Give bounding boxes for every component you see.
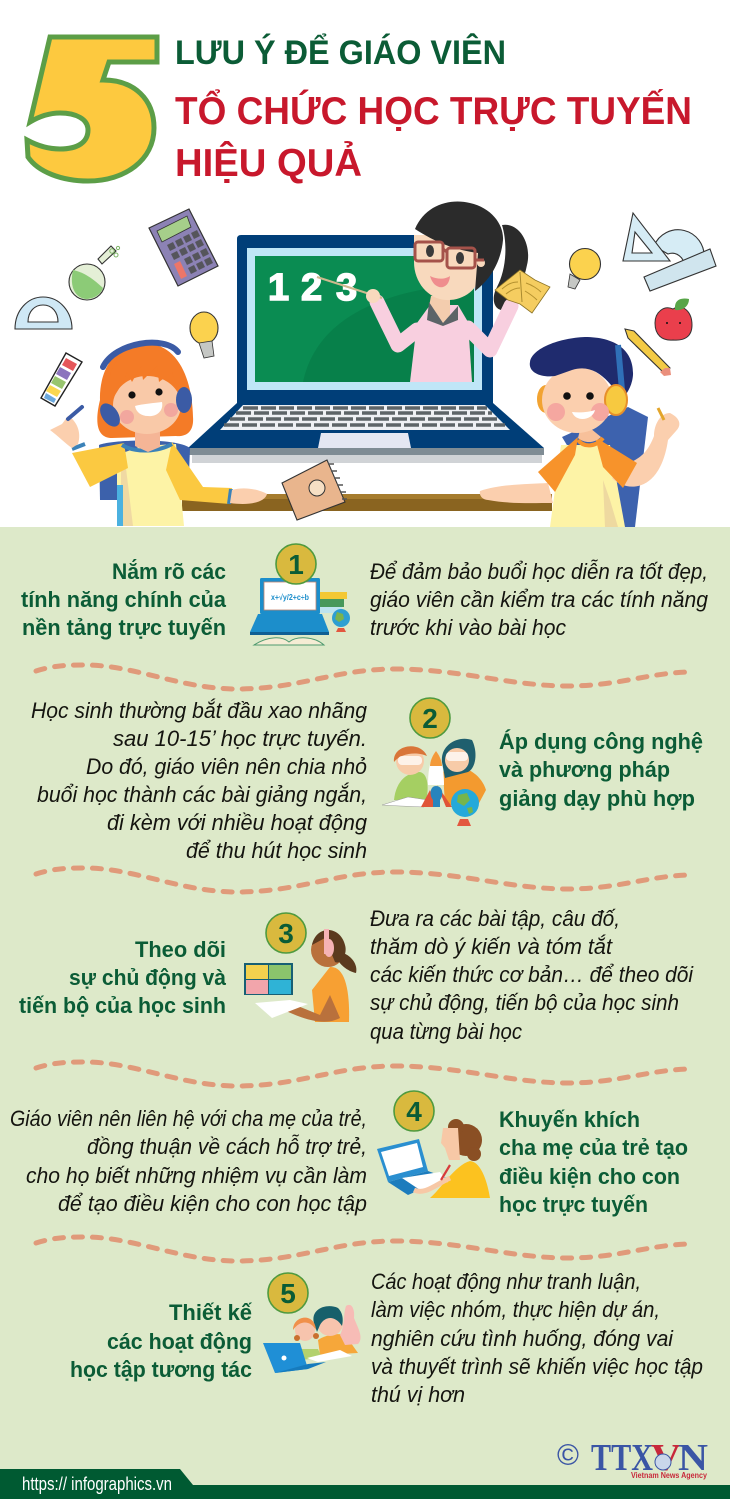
number badge 1 <box>276 544 316 584</box>
heading 5: học tập tương tác <box>70 1357 252 1382</box>
heading 1 <box>21 559 227 640</box>
body text 1: Để đảm bảo buổi học diễn ra tốt đẹp, <box>370 559 708 584</box>
section 1 <box>21 544 709 645</box>
divider lines <box>36 665 693 1261</box>
heading 2: giảng dạy phù hợp <box>499 786 695 811</box>
body text 4: cho họ biết những nhiệm vụ cần làm <box>26 1163 367 1188</box>
floating icon: pencil <box>625 329 671 376</box>
body text 3: thăm dò ý kiến và tóm tắt <box>370 934 613 959</box>
body text 2: để thu hút học sinh <box>186 838 367 863</box>
title line 3: HIỆU QUẢ <box>175 141 362 185</box>
icon: parent with laptop <box>377 1119 490 1198</box>
floating icon: colour palette <box>41 353 82 406</box>
number badge 1: 1 <box>288 549 304 580</box>
heading 1: nền tảng trực tuyến <box>22 615 226 640</box>
body text 3: Đưa ra các bài tập, câu đố, <box>370 906 620 931</box>
section 4 <box>10 1091 688 1217</box>
number badge 4: 4 <box>406 1096 422 1127</box>
body text 5: làm việc nhóm, thực hiện dự án, <box>371 1297 660 1322</box>
number badge 5: 5 <box>280 1278 296 1309</box>
footer bar <box>0 1469 730 1499</box>
number badge 2: 2 <box>422 703 438 734</box>
logo: TTXVN: Vietnam News Agency <box>631 1470 707 1480</box>
body text 4: để tạo điều kiện cho con học tập <box>58 1191 367 1216</box>
heading 3 <box>19 937 227 1018</box>
icon: laptop with books and globe <box>250 578 350 645</box>
hero illustration: online classroom <box>15 201 716 527</box>
heading 4: học trực tuyến <box>499 1192 648 1217</box>
table <box>182 494 552 511</box>
body text 1: giáo viên cần kiểm tra các tính năng <box>370 587 709 612</box>
body text 3: các kiến thức cơ bản… để theo dõi <box>370 962 694 987</box>
icon: laptop with books and globe: x+√y/2+c÷b <box>271 593 309 602</box>
big numeral 5 <box>27 37 157 181</box>
title block <box>27 34 692 185</box>
number badge 3: 3 <box>278 918 294 949</box>
body text 1: trước khi vào bài học <box>370 615 566 640</box>
heading 1: Nắm rõ các <box>112 559 226 584</box>
section 2 <box>31 698 703 863</box>
floating icon: set square and ruler <box>623 213 716 291</box>
notebook <box>282 460 347 520</box>
heading 4: Khuyến khích <box>499 1107 640 1132</box>
number badge 5 <box>268 1273 308 1313</box>
body text 2: Do đó, giáo viên nên chia nhỏ <box>86 754 367 779</box>
number badge 2 <box>410 698 450 738</box>
number badge 3 <box>266 913 306 953</box>
body text 3: qua từng bài học <box>370 1019 522 1044</box>
body text 2: Học sinh thường bắt đầu xao nhãng <box>31 698 368 723</box>
heading 4: điều kiện cho con <box>499 1164 680 1189</box>
heading 3: Theo dõi <box>135 937 226 962</box>
boy student <box>480 337 679 527</box>
girl student <box>50 343 267 526</box>
body text 2: đi kèm với nhiều hoạt động <box>107 810 368 835</box>
board numbers: 1 <box>268 267 289 309</box>
laptop <box>188 235 544 463</box>
heading 3: sự chủ động và <box>69 965 227 990</box>
heading 1: tính năng chính của <box>21 587 227 612</box>
heading 3: tiến bộ của học sinh <box>19 993 226 1018</box>
logo: TTXVN: N <box>678 1437 708 1479</box>
footer url: https:// infographics.vn <box>22 1474 172 1494</box>
section 3 <box>19 906 694 1044</box>
floating icon: flask <box>69 246 120 300</box>
title line 1: LƯU Ý ĐỂ GIÁO VIÊN <box>175 34 506 72</box>
number badge 4 <box>394 1091 434 1131</box>
board numbers <box>268 267 357 309</box>
body text 4: Giáo viên nên liên hệ với cha mẹ của trẻ, <box>10 1106 367 1131</box>
body text 2 <box>31 698 368 863</box>
body text 5: nghiên cứu tình huống, đóng vai <box>371 1326 674 1351</box>
logo: TTXVN <box>557 1437 708 1480</box>
heading 2: và phương pháp <box>499 757 670 782</box>
logo: TTXVN: V <box>651 1437 682 1479</box>
heading 4 <box>499 1107 688 1217</box>
body text 1 <box>370 559 709 640</box>
section 5 <box>70 1269 703 1407</box>
body text 3 <box>370 906 694 1044</box>
logo: TTXVN: © <box>557 1439 579 1472</box>
body text 5: và thuyết trình sẽ khiến việc học tập <box>371 1354 703 1379</box>
heading 2 <box>499 729 703 811</box>
heading 5: các hoạt động <box>107 1329 252 1354</box>
floating icon: light bulb right <box>568 248 600 289</box>
panel: green content background <box>0 527 730 1499</box>
body text 4: đồng thuận về cách hỗ trợ trẻ, <box>87 1134 367 1159</box>
body text 5: Các hoạt động như tranh luận, <box>371 1269 641 1294</box>
icon: student in video call <box>244 929 356 1022</box>
heading 4: cha mẹ của trẻ tạo <box>499 1135 688 1160</box>
body text 5: thú vị hơn <box>371 1382 465 1407</box>
body text 5 <box>371 1269 703 1407</box>
icon: children with rocket and globe <box>382 739 486 826</box>
body text 4 <box>10 1106 367 1216</box>
heading 5: Thiết kế <box>169 1300 253 1325</box>
heading 2: Áp dụng công nghệ <box>499 729 703 754</box>
body text 3: sự chủ động, tiến bộ của học sinh <box>370 990 679 1015</box>
body text 2: buổi học thành các bài giảng ngắn, <box>37 782 367 807</box>
teacher <box>317 201 550 382</box>
board numbers: 2 <box>301 267 322 309</box>
heading 5 <box>70 1300 253 1382</box>
floating icon: calculator <box>149 209 218 286</box>
floating icon: apple <box>655 299 692 340</box>
icon: parent and child with laptop <box>263 1305 361 1373</box>
title line 2: TỔ CHỨC HỌC TRỰC TUYẾN <box>175 88 692 133</box>
body text 2: sau 10-15’ học trực tuyến. <box>113 726 367 751</box>
floating icon: protractor <box>15 297 72 329</box>
board numbers: 3 <box>336 267 357 309</box>
logo: TTXVN: TTX <box>591 1437 653 1479</box>
floating icon: light bulb left <box>190 312 218 358</box>
